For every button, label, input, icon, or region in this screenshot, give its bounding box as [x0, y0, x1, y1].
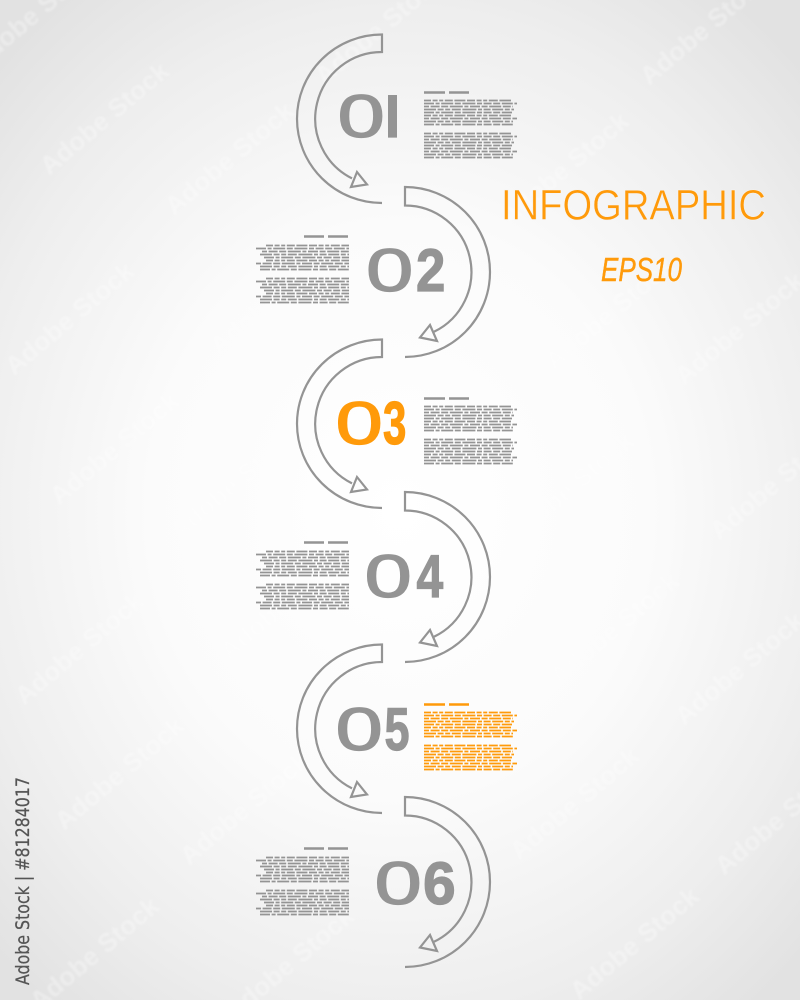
number 03: 0 — [336, 389, 383, 457]
step 02 — [256, 187, 490, 357]
number 06 — [374, 849, 456, 917]
number 03 — [336, 389, 406, 457]
arrow 01 — [297, 34, 382, 203]
text block 02 — [256, 236, 349, 302]
arrow 02 — [405, 187, 490, 357]
watermark pattern: Adobe Stock — [494, 105, 635, 231]
step 03 — [297, 340, 517, 508]
number 02: 2 — [416, 237, 445, 304]
watermark pattern: Adobe Stock — [544, 565, 685, 691]
text block 04 — [256, 542, 349, 608]
text block 01 — [424, 92, 517, 158]
watermark pattern: Adobe Stock — [214, 540, 355, 666]
watermark pattern: Adobe Stock — [204, 235, 345, 361]
watermark pattern: Adobe Stock — [34, 55, 175, 181]
arrow 03 — [297, 340, 382, 508]
watermark pattern: Adobe Stock — [539, 250, 680, 376]
step 06 — [256, 797, 490, 967]
number 02 — [366, 236, 445, 304]
arrow 05 — [297, 644, 382, 813]
watermark pattern: Adobe Stock — [9, 585, 150, 711]
number 06: 6 — [423, 849, 456, 917]
watermark pattern: Adobe Stock — [0, 255, 140, 381]
step 04 — [256, 492, 490, 662]
number 01: 0 — [338, 82, 385, 150]
number 05 — [336, 695, 410, 764]
watermark pattern: Adobe Stock — [159, 95, 300, 221]
arrow 06 — [405, 797, 490, 967]
step 05 — [297, 644, 517, 813]
text block 05 — [424, 704, 517, 770]
number 04 — [364, 542, 443, 610]
number 03: 3 — [383, 390, 406, 457]
watermark pattern: Adobe Stock — [499, 425, 640, 551]
number 01: 1 — [374, 83, 408, 150]
title: INFOGRAPHIC — [501, 182, 766, 230]
watermark pattern: Adobe Stock — [504, 740, 645, 866]
number 04: 4 — [416, 543, 443, 610]
number 01 — [340, 94, 397, 138]
number 06: 0 — [374, 849, 422, 917]
number 02: 0 — [366, 236, 413, 304]
step 01 — [297, 34, 517, 203]
watermark pattern: Adobe Stock — [49, 710, 190, 836]
number 05: 5 — [384, 697, 410, 764]
watermark pattern: Adobe Stock — [174, 745, 315, 871]
text block 03 — [424, 398, 517, 464]
stock label: Adobe Stock | #81284017 — [12, 777, 34, 985]
number 05: 0 — [336, 695, 383, 763]
watermark pattern: Adobe Stock — [164, 420, 305, 546]
subtitle: EPS10 — [601, 251, 683, 288]
number 04: 0 — [364, 542, 412, 610]
arrow 04 — [405, 492, 490, 662]
watermark pattern: Adobe Stock — [44, 385, 185, 511]
text block 06 — [256, 848, 349, 914]
